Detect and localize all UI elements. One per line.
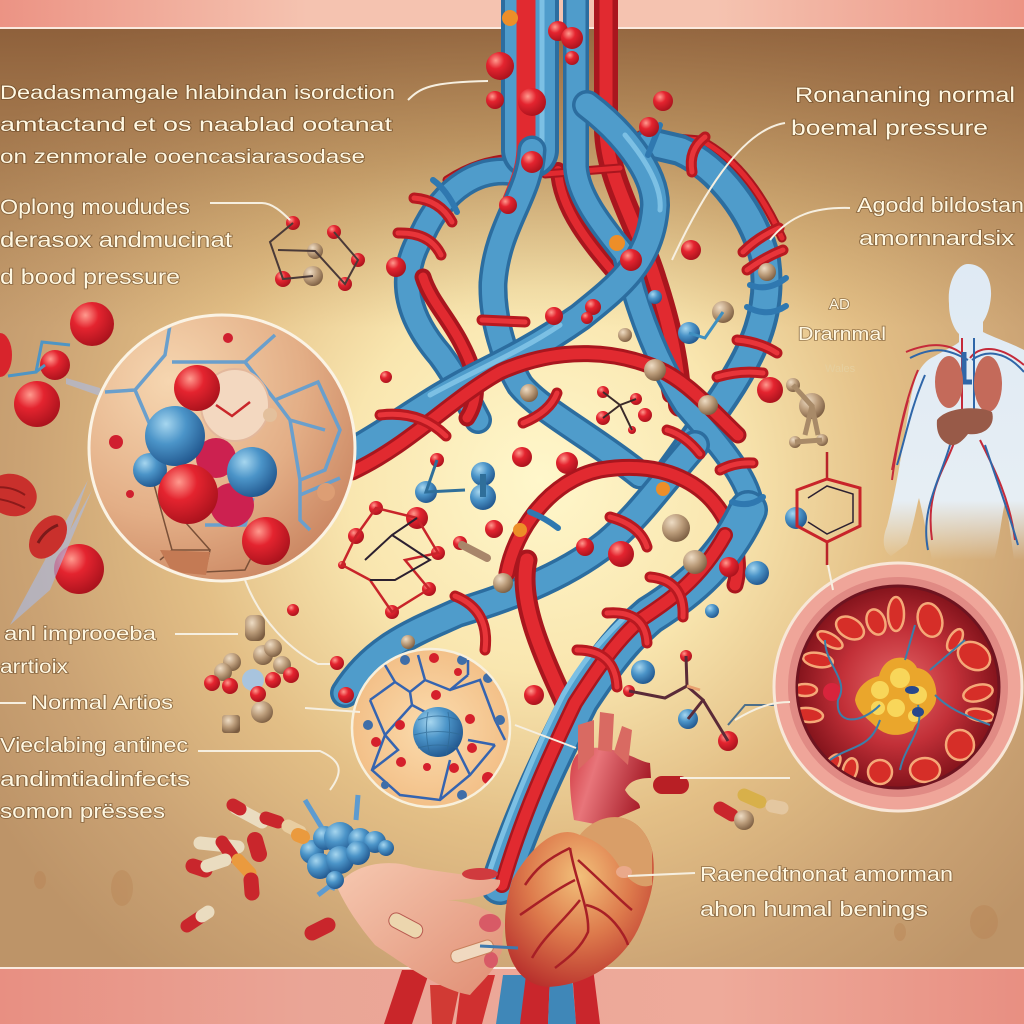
small left molecule bonds xyxy=(8,342,70,376)
pointer rays from lens xyxy=(10,378,100,625)
text: normal artios: Normal Artios xyxy=(31,692,173,714)
text: left callout modules: d bood pressure xyxy=(0,266,180,289)
text: right callout xyxy=(857,195,1024,250)
lens: cellular network xyxy=(352,649,510,807)
heart xyxy=(505,712,654,987)
vessel: right blue arch xyxy=(650,143,767,470)
vessel: top arch red xyxy=(447,135,782,238)
vessels network xyxy=(345,0,786,1024)
text: right callout: Agodd bildostan xyxy=(857,195,1024,217)
molecule structures xyxy=(270,223,860,741)
vessel: central red xyxy=(558,170,670,395)
text: top right callout: boemal pressure xyxy=(791,117,988,140)
vessel: red arc xyxy=(352,354,738,472)
particles: blue spheres xyxy=(415,290,807,729)
text: body label xyxy=(798,296,886,375)
text: top left callout: on zenmorale ooencasiarasodase xyxy=(0,146,365,168)
text: top left callout: amtactand et os naablad ootanat xyxy=(0,114,393,136)
vessel: red arch xyxy=(507,468,737,585)
text: lower left impro label: anl improoeba xyxy=(4,624,157,645)
vessel: left branch xyxy=(493,150,640,475)
text: left callout modules: Oplong moududes xyxy=(0,196,190,219)
text: lower left impro label xyxy=(0,624,157,678)
particles: tan spheres xyxy=(303,243,828,649)
text: bottom right callout: Raenedtnonat amorman xyxy=(700,864,953,886)
text: right callout: amornnardsix xyxy=(859,228,1014,250)
vessel: red on left loop xyxy=(423,277,475,418)
left edge cell xyxy=(0,333,12,377)
text: lower left callout: Vieclabing antinec xyxy=(0,735,188,757)
particles: orange spheres xyxy=(502,10,670,537)
cuffs: blue wraps xyxy=(433,125,786,528)
text: top left callout xyxy=(0,82,395,168)
body silhouette with circulatory system xyxy=(884,264,1024,560)
red blood cells left xyxy=(0,468,75,566)
vessel: top trunk xyxy=(510,0,542,205)
text: top right callout xyxy=(791,84,1015,140)
text: top left callout: Deadasmamgale hlabindan isordction xyxy=(0,82,395,104)
vessel: left blue loop xyxy=(408,171,512,420)
text: bottom right callout: ahon humal benings xyxy=(700,899,928,921)
hand xyxy=(337,863,518,995)
cluster molecule xyxy=(204,615,299,733)
pills xyxy=(34,785,998,941)
text: top right callout: Ronananing normal xyxy=(795,84,1015,107)
cuffs: red wraps xyxy=(380,137,783,687)
text: body label: AD xyxy=(829,296,850,313)
vessel: lower blue xyxy=(345,445,695,693)
text: left callout modules: derasox andmucinat xyxy=(0,229,232,252)
text: body label: Drarnmal xyxy=(798,324,886,344)
blue cell cluster xyxy=(300,795,394,895)
vessel: red descending xyxy=(525,560,568,710)
vessel: big diagonal blue xyxy=(352,105,660,452)
vessel: bottom trunks xyxy=(384,960,600,1024)
text: lower left callout: somon prësses xyxy=(0,801,165,823)
text: lower left callout xyxy=(0,735,190,823)
vessel: rear red top strand xyxy=(606,0,680,405)
text: left callout modules xyxy=(0,196,232,289)
bottom band xyxy=(0,968,1024,1024)
particles: red spheres xyxy=(14,21,783,751)
artery cross-section xyxy=(774,563,1022,811)
text: bottom right callout xyxy=(700,864,953,921)
vessel: lower trunk xyxy=(490,510,748,885)
text: lower left impro label: arrtioix xyxy=(0,657,69,678)
lens: molecular close-up xyxy=(89,315,355,581)
callout lines xyxy=(0,81,850,876)
text: lower left callout: andimtiadinfects xyxy=(0,769,190,791)
top band xyxy=(0,0,1024,28)
capsule rod xyxy=(462,545,487,558)
text: body label: Wales xyxy=(825,363,856,375)
vessel: second blue xyxy=(576,0,752,512)
